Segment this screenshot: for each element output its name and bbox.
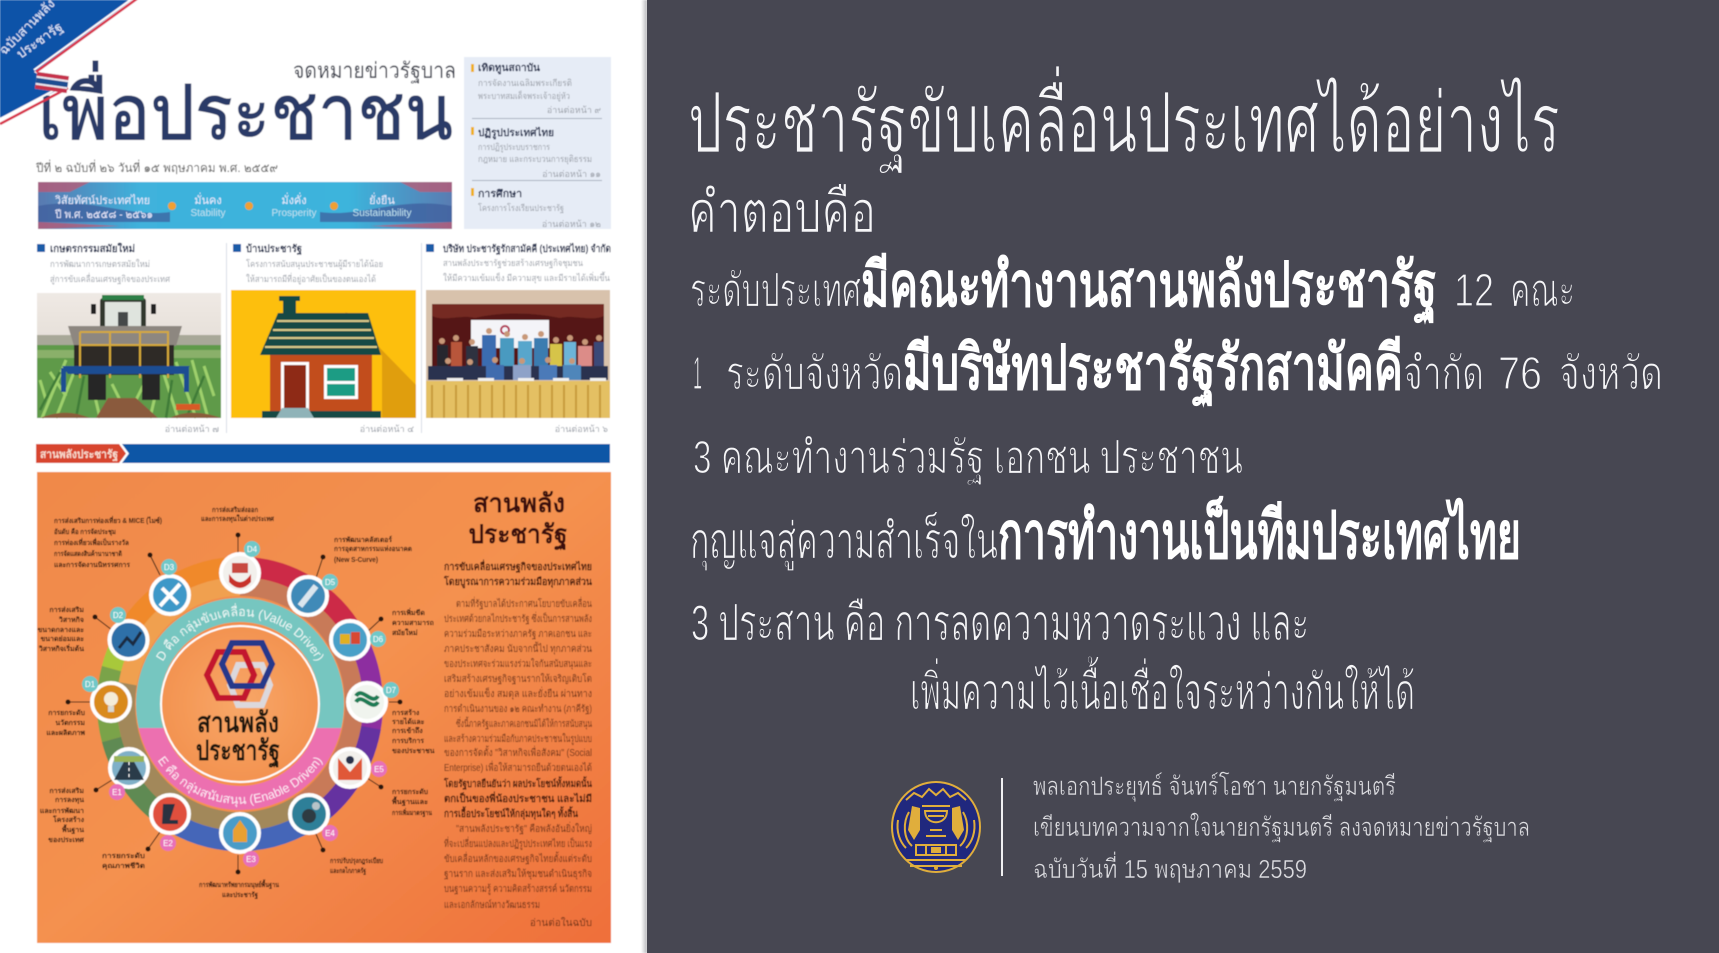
- feature body text: ฐานราก และส่งเสริมให้ชุมชนดำเนินธุรกิจ: [444, 868, 592, 880]
- feature body text: ภาคประชาสังคม นับจากนี้ไป ทุกภาคส่วน: [444, 641, 592, 655]
- feature body text: ตามที่รัฐบาลได้ประกาศนโยบายขับเคลื่อน: [456, 596, 592, 610]
- attribution text: พลเอกประยุทธ์ จันทร์โอชา นายกรัฐมนตรี: [1033, 771, 1396, 802]
- node badges: E5: [374, 765, 384, 774]
- section bar: Saan Palang Pracharath: [36, 444, 610, 463]
- article: Pracharath company: อ่านต่อหน้า ๖: [555, 424, 608, 434]
- feature body text: เสริมสร้างเศรษฐกิจฐานรากให้เจริญเติบโต: [444, 672, 592, 685]
- node captions: การปรับปรุงกฎระเบียบ: [330, 857, 383, 865]
- illustration: house: [231, 290, 416, 418]
- node captions: พื้นฐาน: [62, 823, 84, 835]
- chart: circular driver diagram: ประชารัฐ: [196, 735, 280, 769]
- node captions: การส่งเสริมส่งออก: [212, 506, 258, 514]
- feature body text: ของประเทศจะร่วมแรงร่วมใจกันสนับสนุนและ: [444, 658, 592, 670]
- node captions: [38, 506, 435, 900]
- node captions: และประชารัฐ: [222, 891, 258, 900]
- vision banner: ยั่งยืน: [369, 192, 395, 207]
- node captions: การท่องเที่ยวเพื่อเป็นรางวัล: [54, 537, 129, 547]
- feature heading: สานพลัง: [473, 488, 565, 518]
- node captions: ของประชาชน: [392, 747, 435, 755]
- feature body text: การดำเนินงานของ ๑๒ คณะทำงาน (ภาคีรัฐ): [444, 703, 592, 715]
- section bar: Saan Palang Pracharath: สานพลังประชารัฐ: [40, 448, 118, 462]
- value driver arc label: D คือ กลุ่มขับเคลื่อน (Value Driver): [156, 602, 324, 662]
- feature body text: ซึ่งนี้ภาครัฐและภาคเอกชนมิได้ให้การสนับสนุน: [456, 716, 592, 730]
- node badges: D3: [164, 563, 175, 572]
- feature sub-heading: โดยบูรณาการความร่วมมือทุกภาคส่วน: [443, 575, 592, 589]
- feature body text: "สานพลังประชารัฐ" คือพลังอันยิ่งใหญ่: [456, 821, 592, 835]
- line: key to success: กุญแจสู่ความสำเร็จใน: [690, 511, 998, 571]
- feature body text: และเอกลักษณ์ทางวัฒนธรรม: [444, 899, 540, 911]
- article: modern agriculture: การพัฒนาการเกษตรสมัยใหม่: [50, 259, 150, 269]
- photo: group at signing table: [426, 290, 610, 418]
- attribution text: [1033, 771, 1530, 884]
- node captions: ขนาดกลางและ: [38, 627, 84, 634]
- logo: interlocked hexagons: [207, 643, 272, 705]
- enable driver arc label: E คือ กลุ่มสนับสนุน (Enable Driven): [158, 756, 324, 808]
- node badges: D2: [113, 611, 124, 620]
- vision banner: ปี พ.ศ. ๒๕๕๘ - ๒๕๖๑: [54, 208, 153, 221]
- line: provincial level: 1: [693, 347, 702, 399]
- line: provincial level: [693, 334, 1663, 408]
- photo: tractor in field: [37, 293, 221, 418]
- chart: circular driver diagram: [37, 506, 435, 900]
- icon glyphs: [104, 563, 378, 842]
- node captions: การส่งเสริม: [49, 787, 84, 795]
- node captions: ของประเทศ: [48, 836, 85, 844]
- article: Pracharath company: สานพลังประชารัฐช่วยสร้างเศรษฐกิจชุมชน: [443, 258, 583, 269]
- node captions: การเข้าถึง: [392, 726, 423, 735]
- feature body text: ประเทศด้วยกลไกประชารัฐ ซึ่งเป็นการสานพลัง: [444, 611, 592, 625]
- node captions: คุณภาพชีวิต: [102, 862, 146, 870]
- feature body text: ตกเป็นของพี่น้องประชาชน และไม่มี: [444, 791, 592, 805]
- node badges: D6: [373, 635, 384, 644]
- node badges: D4: [247, 545, 258, 554]
- node captions: และผลิตภาพ: [46, 729, 85, 737]
- feature body text: โดยรัฐบาลยืนยันว่า ผลประโยชน์ทั้งหมดนั้น: [443, 776, 592, 790]
- node captions: การสร้าง: [392, 708, 420, 717]
- emblem: government seal: [891, 781, 981, 873]
- node captions: การเพิ่มมาตรฐาน: [392, 807, 432, 818]
- sidebar: contents box: การปฏิรูประบบราชการ: [478, 142, 550, 153]
- vision banner: มั่งคั่ง: [281, 192, 307, 207]
- vision banner: Stability: [190, 208, 226, 219]
- teal value driver ring: [135, 597, 345, 728]
- node captions: พื้นฐานและ: [392, 795, 428, 807]
- sidebar: contents box: อ่านต่อหน้า ๙: [547, 105, 601, 115]
- answer label: คำตอบคือ: [688, 180, 876, 245]
- node captions: โครงสร้าง: [52, 815, 85, 824]
- node badges: D1: [85, 680, 96, 689]
- sidebar: contents box: เทิดทูนสถาบัน: [478, 62, 540, 75]
- panel: newspaper page: [0, 0, 647, 953]
- feature body text: ที่จะเปลี่ยนแปลงและปฏิรูปประเทศไทย เป็นแรง: [444, 836, 592, 850]
- article: modern agriculture: [37, 242, 221, 434]
- feature body text: และสร้างความร่วมมือกับภาคประชาชนในรูปแบบ: [444, 733, 592, 745]
- line: key to success: [690, 495, 1521, 572]
- feature body text: บนฐานความรู้ ความคิดสร้างสรรค์ นวัตกรรม: [444, 883, 592, 895]
- node captions: การลงทุน: [55, 797, 84, 804]
- article: people's housing: โครงการสนับสนุนประชาชนผู้มีรายได้น้อย: [246, 259, 383, 270]
- node badges: [82, 541, 399, 867]
- feature body text: ความร่วมมือระหว่างภาครัฐ ภาคเอกชน และ: [444, 628, 592, 640]
- sidebar: contents box: โครงการโรงเรียนประชารัฐ: [478, 203, 564, 214]
- node captions: ความสามารถ: [392, 620, 434, 627]
- pink enable driver ring: [138, 728, 342, 811]
- node captions: วิสาหกิจ: [58, 616, 84, 624]
- line: provincial level: 76: [1498, 347, 1542, 399]
- article: people's housing: [231, 243, 416, 434]
- ribbon corner badge: [0, 0, 138, 124]
- feature body text: อย่างเข้มแข็ง สมดุล และยั่งยืน ผ่านทาง: [444, 686, 592, 700]
- line: provincial level: จังหวัด: [1559, 347, 1663, 399]
- node badges: E2: [163, 839, 173, 848]
- attribution text: เขียนบทความจากใจนายกรัฐมนตรี ลงจดหมายข่าวรัฐบาล: [1033, 812, 1530, 843]
- line: national level: มีคณะทำงานสานพลังประชารัฐ: [861, 251, 1437, 325]
- node captions: การอุตสาหกรรมแห่งอนาคต: [334, 545, 412, 553]
- article: Pracharath company: บริษัท ประชารัฐรักสามัคคี (ประเทศไทย) จำกัด: [443, 242, 611, 255]
- leader lines: [66, 533, 402, 874]
- node captions: สมัยใหม่: [392, 628, 418, 637]
- icon nodes D1 to D7 and E1 to E5: [92, 554, 386, 852]
- article: people's housing: บ้านประชารัฐ: [246, 243, 302, 255]
- node captions: และการพัฒนา: [40, 807, 84, 815]
- node captions: การยกระดับ: [48, 709, 86, 717]
- issue date line: ปีที่ ๒ ฉบับที่ ๒๖ วันที่ ๑๕ พฤษภาคม พ.ศ. ๒๕๕๙: [35, 159, 278, 175]
- vision banner: มั่นคง: [194, 192, 222, 207]
- line: provincial level: มีบริษัทประชารัฐรักสามัคคี: [903, 334, 1403, 408]
- node captions: รายได้และ: [392, 717, 425, 726]
- sidebar: contents box: พระบาทสมเด็จพระเจ้าอยู่หัว: [478, 89, 570, 102]
- panel: dark quote background: [647, 0, 1719, 953]
- outer ring segments: [53, 511, 427, 897]
- article: modern agriculture: สู่การขับเคลื่อนเศรษฐกิจของประเทศ: [50, 272, 170, 285]
- ribbon corner badge: ประชารัฐ: [14, 19, 66, 62]
- node captions: (New S-Curve): [334, 557, 378, 564]
- node badges: E4: [325, 829, 335, 838]
- vision banner: วิสัยทัศน์ประเทศไทย: [54, 194, 150, 207]
- sidebar: contents box: อ่านต่อหน้า ๑๒: [542, 219, 601, 229]
- node captions: การบริการ: [392, 737, 424, 745]
- article: modern agriculture: เกษตรกรรมสมัยใหม่: [50, 242, 135, 255]
- node captions: การส่งเสริมการท่องเที่ยว & MICE (ไมซ์): [54, 515, 162, 525]
- line: national level: 12: [1454, 264, 1494, 316]
- article: modern agriculture: อ่านต่อหน้า ๗: [165, 424, 219, 434]
- feature sub-heading: การขับเคลื่อนเศรษฐกิจของประเทศไทย: [444, 559, 592, 573]
- node captions: ขนาดย่อมและ: [40, 635, 84, 643]
- sidebar: contents box: กฎหมาย และกระบวนการยุติธรรม: [478, 154, 592, 165]
- node captions: การพัฒนาคลัสเตอร์: [334, 535, 392, 544]
- feature body text: ขับเคลื่อนหลักของเศรษฐกิจไทยตั้งแต่ระดับ: [444, 851, 592, 865]
- sidebar: contents box: การจัดงานเฉลิมพระเกียรติ: [478, 78, 572, 88]
- line: three working groups: 3 คณะทำงานร่วมรัฐ เอกชน ประชาชน: [693, 431, 1243, 485]
- vision banner: Sustainability: [353, 208, 411, 219]
- line: provincial level: จำกัด: [1403, 347, 1484, 399]
- feature sub-heading: [443, 559, 592, 589]
- masthead subtitle: จดหมายข่าวรัฐบาล: [293, 58, 456, 84]
- node captions: การยกระดับ: [102, 852, 146, 860]
- line: provincial level: ระดับจังหวัด: [726, 347, 903, 399]
- vision banner: [38, 182, 452, 229]
- node captions: การเพิ่มขีด: [392, 607, 425, 617]
- panel: orange Pracharath feature: ประชารัฐ: [468, 519, 568, 552]
- node badges: E1: [112, 788, 122, 797]
- node captions: อันดับ คือ การจัดประชุม: [54, 528, 116, 536]
- node captions: การส่งเสริม: [49, 606, 84, 614]
- line: build trust: เพิ่มความไว้เนื้อเชื่อใจระหว่างกันให้ได้: [910, 656, 1415, 720]
- node captions: วิสาหกิจเริ่มต้น: [38, 643, 84, 653]
- node captions: นวัตกรรม: [55, 719, 85, 727]
- feature body text: การเอื้อประโยชน์ให้กลุ่มทุนใดๆ ทั้งสิ้น: [444, 806, 578, 820]
- article: people's housing: อ่านต่อหน้า ๔: [360, 424, 414, 434]
- attribution text: ฉบับวันที่ 15 พฤษภาคม 2559: [1033, 851, 1307, 884]
- panel: orange Pracharath feature: [36, 471, 612, 944]
- article: Pracharath company: [426, 242, 611, 434]
- feature body text: Enterprise) เพื่อให้สามารถยืนด้วยตนเองได้: [444, 760, 592, 774]
- feature body text: อ่านต่อในฉบับ: [530, 917, 592, 929]
- node captions: และการจัดงานนิทรรศการ: [54, 561, 130, 569]
- article: Pracharath company: ให้มีความเข้มแข็ง มีความสุข และมีรายได้เพิ่มขึ้น: [443, 271, 610, 284]
- feature body text: [443, 596, 592, 929]
- article: people's housing: ให้สามารถมีที่อยู่อาศัยเป็นของตนเองได้: [246, 272, 376, 285]
- node badges: D7: [386, 686, 397, 695]
- masthead title: เพื่อประชาชน: [38, 61, 453, 156]
- line: national level: [690, 251, 1575, 325]
- node captions: การพัฒนาทรัพยากรมนุษย์พื้นฐาน: [199, 878, 279, 890]
- node captions: และกลไกภาครัฐ: [330, 866, 366, 876]
- node captions: และการลงทุนในต่างประเทศ: [201, 514, 274, 523]
- sidebar: contents box: การศึกษา: [478, 188, 522, 200]
- node captions: การจัดแสดงสินค้านานาชาติ: [54, 549, 122, 558]
- line: three coordinations: 3 ประสาน คือ การลดความหวาดระแวง และ: [691, 595, 1309, 651]
- node badges: D5: [325, 578, 336, 587]
- centre circle: [161, 626, 319, 782]
- node captions: การยกระดับ: [392, 788, 429, 796]
- line: national level: ระดับประเทศ: [690, 264, 861, 316]
- feature body text: ของการจัดตั้ง "วิสาหกิจเพื่อสังคม" (Social: [444, 745, 592, 759]
- sidebar: contents box: [464, 57, 611, 229]
- line: national level: คณะ: [1510, 264, 1575, 316]
- sidebar: contents box: ปฏิรูปประเทศไทย: [478, 126, 554, 140]
- centre title: สานพลัง: [197, 707, 279, 738]
- sidebar: contents box: อ่านต่อหน้า ๑๑: [542, 169, 601, 179]
- vision banner: Prosperity: [271, 208, 317, 219]
- node badges: E3: [246, 855, 256, 864]
